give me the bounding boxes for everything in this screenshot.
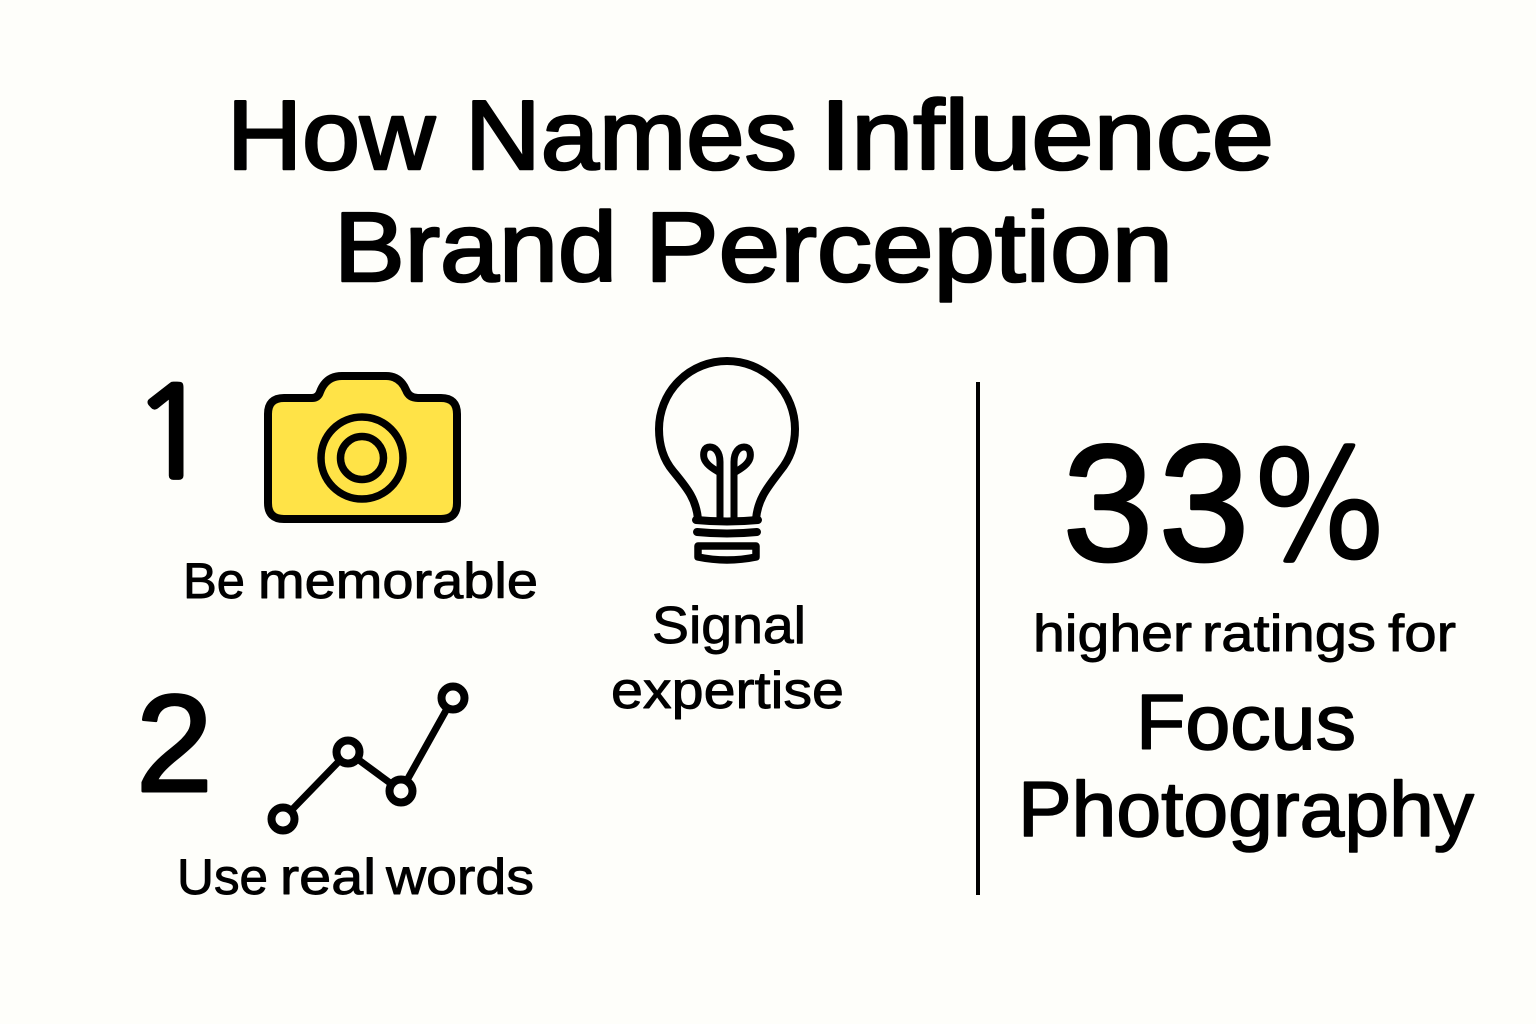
title: Influence — [820, 80, 1274, 190]
label: be memorable: memorable — [258, 553, 538, 609]
label: use real words: real — [280, 849, 376, 905]
title: How — [227, 80, 436, 190]
number 1: 1 — [131, 370, 213, 495]
label: higher ratings for: for — [1388, 605, 1456, 663]
title: Names — [465, 80, 797, 190]
label: use real words — [177, 849, 534, 905]
label: signal expertise: Signal — [652, 597, 806, 655]
icon: camera — [268, 376, 457, 519]
statistic: 33%: % — [1244, 433, 1395, 581]
title — [227, 80, 1274, 302]
label: use real words: Use — [177, 849, 268, 905]
statistic: 33% — [1063, 411, 1395, 595]
statistic: 33%: 3 — [1159, 411, 1249, 595]
label: be memorable: Be — [183, 553, 245, 609]
label: signal expertise — [611, 597, 844, 720]
title: Perception — [645, 192, 1173, 302]
label: higher ratings for: higher — [1033, 605, 1192, 663]
vertical divider — [976, 382, 980, 895]
brand name — [1018, 678, 1474, 853]
title: Brand — [334, 192, 617, 302]
brand name: Photography — [1018, 765, 1474, 853]
label: signal expertise: expertise — [611, 662, 844, 720]
label: use real words: words — [385, 849, 534, 905]
statistic: 33%: 3 — [1063, 411, 1153, 595]
icon: light bulb — [659, 361, 795, 560]
icon: line chart — [272, 686, 464, 830]
label: higher ratings for — [1033, 605, 1456, 663]
number 2: 2 — [136, 667, 213, 821]
brand name: Focus — [1136, 678, 1356, 766]
label: higher ratings for: ratings — [1202, 605, 1376, 663]
